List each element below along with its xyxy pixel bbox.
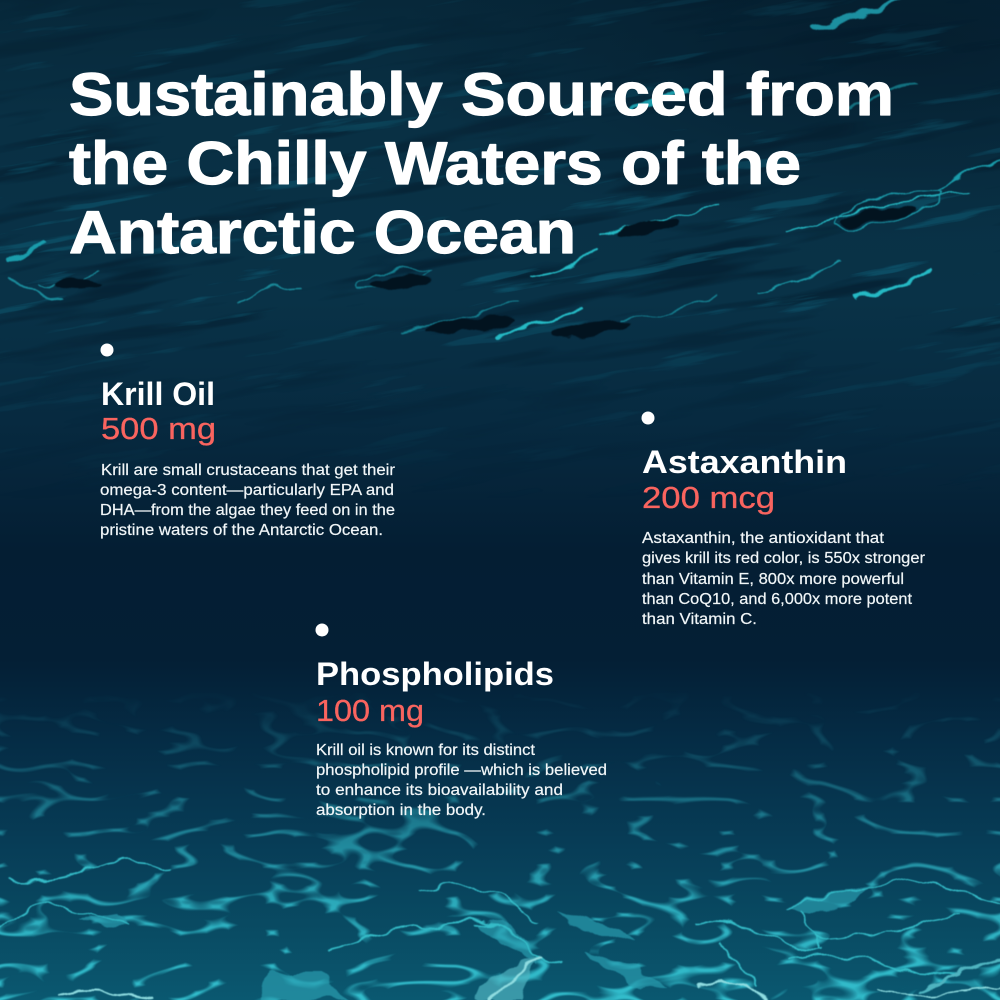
- bullet dot: [316, 624, 328, 636]
- description: [642, 530, 925, 628]
- description: phospholipid profile —which is believed: [316, 762, 607, 779]
- description: than Vitamin E, 800x more powerful: [642, 571, 904, 588]
- description: DHA—from the algae they feed on in the: [100, 502, 395, 519]
- description: than Vitamin C.: [642, 611, 757, 628]
- heading: Krill Oil: [101, 376, 215, 412]
- bullet dot: [100, 344, 114, 356]
- panel: krill oil: [100, 344, 395, 539]
- title: Sustainably Sourced from: [69, 61, 894, 128]
- background: lower water caustic veins: [0, 680, 1000, 1000]
- dose: 200 mcg: [642, 480, 775, 515]
- description: than CoQ10, and 6,000x more potent: [642, 591, 913, 608]
- description: absorption in the body.: [316, 802, 486, 819]
- description: Astaxanthin, the antioxidant that: [642, 530, 885, 547]
- panel: phospholipids: [316, 624, 607, 819]
- description: [100, 462, 395, 539]
- panel: astaxanthin: [642, 412, 925, 628]
- bullet dot: [642, 412, 654, 424]
- dose: 500 mg: [101, 411, 216, 446]
- description: Krill are small crustaceans that get their: [101, 462, 395, 479]
- title: [69, 61, 894, 266]
- title: Antarctic Ocean: [69, 199, 576, 266]
- heading: Astaxanthin: [642, 444, 847, 480]
- description: Krill oil is known for its distinct: [316, 742, 536, 759]
- heading: Phospholipids: [316, 656, 554, 692]
- background: upper water texture: [0, 0, 1000, 406]
- dose: 100 mg: [316, 693, 424, 728]
- title: the Chilly Waters of the: [69, 130, 801, 197]
- description: [316, 742, 607, 819]
- description: pristine waters of the Antarctic Ocean.: [100, 522, 383, 539]
- description: omega-3 content—particularly EPA and: [100, 482, 394, 499]
- background: upper water surface ripples: [10, 0, 1000, 342]
- background: lower water caustics: [0, 861, 1000, 1000]
- description: to enhance its bioavailability and: [316, 782, 563, 799]
- description: gives krill its red color, is 550x stronger: [642, 550, 925, 567]
